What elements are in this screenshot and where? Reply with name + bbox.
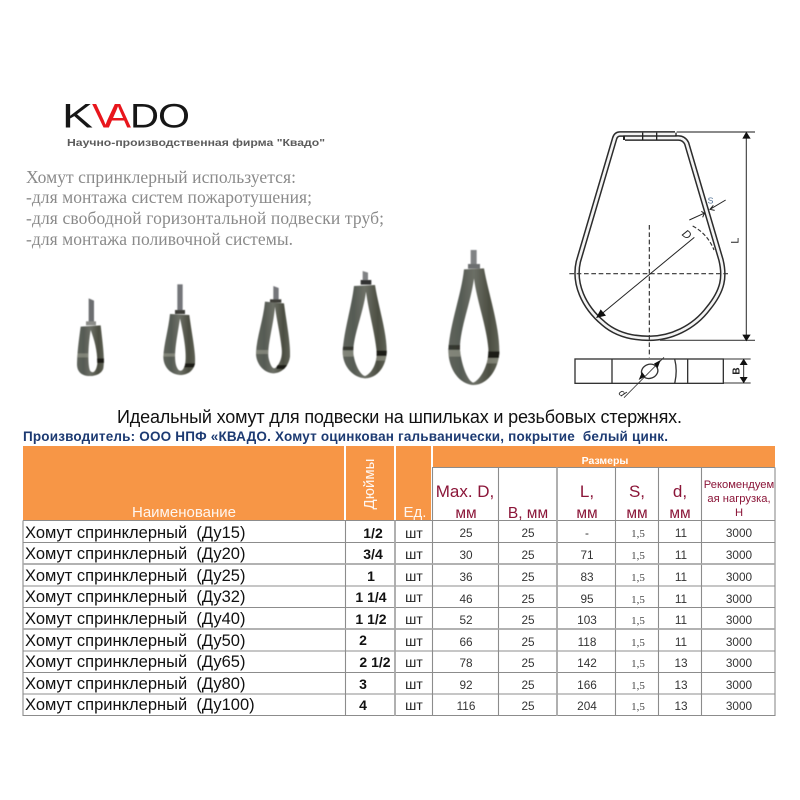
row Ду65: 142 xyxy=(577,656,597,670)
technical drawing: clamp dimensions xyxy=(569,132,755,400)
text block: usage list: -для монтажа систем пожаротушения; xyxy=(26,187,312,207)
row Ду65: 1,5 xyxy=(631,658,645,670)
row Ду80: 1,5 xyxy=(631,680,645,692)
table header: мм xyxy=(455,505,477,522)
row Ду65: шт xyxy=(405,654,423,670)
table header: B, мм xyxy=(508,505,548,522)
logo: KVADO: D xyxy=(130,98,159,136)
table header: Размеры xyxy=(582,455,628,467)
dimension S: S xyxy=(708,195,714,205)
row Ду80: 25 xyxy=(521,678,535,692)
logo: KVADO: K xyxy=(62,98,93,136)
clamp 3 xyxy=(256,286,290,373)
row Ду20: 71 xyxy=(580,548,594,562)
row Ду80 xyxy=(25,675,753,693)
row Ду65: 3000 xyxy=(726,656,753,670)
row Ду20: 11 xyxy=(675,548,687,562)
row Ду80: Хомут спринклерный (Ду80) xyxy=(25,675,245,693)
logo: KVADO xyxy=(62,98,325,149)
dimension D xyxy=(596,228,694,318)
row Ду50: 3000 xyxy=(726,635,753,649)
row Ду15: 1/2 xyxy=(363,525,383,541)
row Ду100: 116 xyxy=(457,699,476,713)
row Ду50: 66 xyxy=(459,635,473,649)
dimension D: D xyxy=(679,228,693,242)
row Ду20: 25 xyxy=(521,548,535,562)
table header xyxy=(23,446,775,522)
heading: ideal clamp: Идеальный хомут для подвески на шпильках и резьбовых стержнях. xyxy=(117,407,682,427)
logo: KVADO: V xyxy=(92,98,119,136)
text block: usage list: -для монтажа поливочной системы. xyxy=(26,229,293,249)
logo: KVADO: A xyxy=(105,98,131,136)
table header: d, xyxy=(673,482,687,501)
row Ду40 xyxy=(25,610,753,628)
row Ду25: шт xyxy=(405,568,423,584)
table header: Наименование xyxy=(132,504,236,521)
row Ду25: 25 xyxy=(521,570,535,584)
row Ду15: 3000 xyxy=(726,526,753,540)
row Ду15: шт xyxy=(405,525,423,541)
row Ду25: 3000 xyxy=(726,570,753,584)
table header: Рекомендуем xyxy=(704,479,774,491)
row Ду20: Хомут спринклерный (Ду20) xyxy=(25,545,245,563)
row Ду40: 1 1/2 xyxy=(355,611,387,627)
row Ду25: 1,5 xyxy=(631,572,645,584)
row Ду20 xyxy=(25,545,753,563)
row Ду15: 11 xyxy=(675,526,687,540)
row Ду100: шт xyxy=(405,697,423,713)
dimension S xyxy=(689,195,726,220)
row Ду15 xyxy=(25,524,753,542)
clamp 5 xyxy=(448,250,499,385)
row Ду80: шт xyxy=(405,676,423,692)
row Ду65: 25 xyxy=(521,656,535,670)
row Ду25 xyxy=(25,567,753,585)
row Ду40: 103 xyxy=(577,613,597,627)
row Ду32 xyxy=(25,588,753,606)
logo: KVADO: O xyxy=(158,98,190,136)
row Ду50: 118 xyxy=(578,635,597,649)
row Ду100: 25 xyxy=(521,699,535,713)
row Ду32: 95 xyxy=(580,592,594,606)
row Ду40: 11 xyxy=(675,613,687,627)
row Ду100 xyxy=(25,696,753,714)
row Ду65: 2 1/2 xyxy=(359,654,391,670)
row Ду20: шт xyxy=(405,546,423,562)
row Ду32: 1,5 xyxy=(631,594,645,606)
table header: мм xyxy=(576,505,598,522)
row Ду25: 36 xyxy=(459,570,473,584)
row Ду32: 46 xyxy=(459,592,473,606)
side view: d xyxy=(616,388,628,400)
row Ду32: Хомут спринклерный (Ду32) xyxy=(25,588,245,606)
clamp 1 xyxy=(77,298,104,376)
row Ду32: 1 1/4 xyxy=(355,589,387,605)
side view xyxy=(575,357,723,400)
dimension B: B xyxy=(732,367,743,375)
table: sizes xyxy=(23,446,775,716)
text block: usage list xyxy=(26,167,384,249)
row Ду32: 3000 xyxy=(726,592,753,606)
row Ду40: 25 xyxy=(521,613,535,627)
row Ду25: Хомут спринклерный (Ду25) xyxy=(25,567,245,585)
row Ду15: 1,5 xyxy=(631,528,645,540)
dimension B xyxy=(723,359,751,383)
row Ду40: шт xyxy=(405,611,423,627)
dimension L: L xyxy=(730,238,742,244)
row Ду100: 4 xyxy=(359,697,367,713)
row Ду40: 3000 xyxy=(726,613,753,627)
row Ду80: 13 xyxy=(674,678,688,692)
row Ду80: 3 xyxy=(359,676,367,692)
row Ду15: 25 xyxy=(459,526,473,540)
clamp outline xyxy=(577,133,723,338)
table header: Max. D, xyxy=(436,482,494,501)
table grid xyxy=(23,468,775,716)
row Ду15: 25 xyxy=(521,526,535,540)
row Ду80: 166 xyxy=(577,678,597,692)
row Ду32: 11 xyxy=(675,592,687,606)
row Ду40: 52 xyxy=(459,613,473,627)
table header: S, xyxy=(629,482,645,501)
row Ду40: Хомут спринклерный (Ду40) xyxy=(25,610,245,628)
centre lines xyxy=(569,225,730,357)
row Ду50: Хомут спринклерный (Ду50) xyxy=(25,632,245,650)
row Ду100: 1,5 xyxy=(631,701,645,713)
row Ду100: Хомут спринклерный (Ду100) xyxy=(25,696,255,714)
row Ду65: Хомут спринклерный (Ду65) xyxy=(25,653,245,671)
table header: Дюймы xyxy=(361,459,378,509)
table header: ая нагрузка, xyxy=(707,493,771,505)
row Ду100: 13 xyxy=(674,699,688,713)
row Ду100: 3000 xyxy=(726,699,753,713)
row Ду25: 83 xyxy=(580,570,594,584)
row Ду50: 1,5 xyxy=(631,637,645,649)
row Ду25: 1 xyxy=(367,568,375,584)
clamp 4 xyxy=(343,271,387,378)
table header: мм xyxy=(626,505,648,522)
row Ду80: 92 xyxy=(459,678,473,692)
row Ду25: 11 xyxy=(675,570,687,584)
row Ду40: 1,5 xyxy=(631,615,645,627)
row Ду32: 25 xyxy=(521,592,535,606)
text block: usage list: Хомут спринклерный используется: xyxy=(26,167,296,187)
row Ду65: 13 xyxy=(674,656,688,670)
row Ду20: 3/4 xyxy=(363,546,383,562)
row Ду15: Хомут спринклерный (Ду15) xyxy=(25,524,245,542)
table header: Н xyxy=(735,507,743,519)
row Ду50: шт xyxy=(405,633,423,649)
row Ду15: - xyxy=(585,526,589,540)
row Ду65 xyxy=(25,653,753,671)
subheading: manufacturer: Производитель: ООО НПФ «КВАДО. Хомут оцинкован гальванически, покрытие белый цинк. xyxy=(23,429,668,444)
row Ду20: 30 xyxy=(459,548,473,562)
row Ду20: 1,5 xyxy=(631,550,645,562)
table header: мм xyxy=(669,505,691,522)
dimension L xyxy=(660,132,755,341)
clamp 2 xyxy=(163,284,195,375)
text block: usage list: -для свободной горизонтальной подвески труб; xyxy=(26,208,384,228)
row Ду50: 11 xyxy=(675,635,687,649)
row Ду50: 2 xyxy=(359,632,367,648)
row Ду50: 25 xyxy=(521,635,535,649)
product photos: five clamps xyxy=(75,250,501,385)
row Ду20: 3000 xyxy=(726,548,753,562)
table header: L, xyxy=(580,482,594,501)
metal sheen xyxy=(75,345,501,369)
row Ду100: 204 xyxy=(577,699,597,713)
table header: Ед. xyxy=(404,504,426,521)
row Ду32: шт xyxy=(405,589,423,605)
row Ду80: 3000 xyxy=(726,678,753,692)
logo: KVADO: Научно-производственная фирма "Квадо" xyxy=(67,137,325,149)
row Ду50 xyxy=(25,632,753,650)
row Ду65: 78 xyxy=(459,656,473,670)
